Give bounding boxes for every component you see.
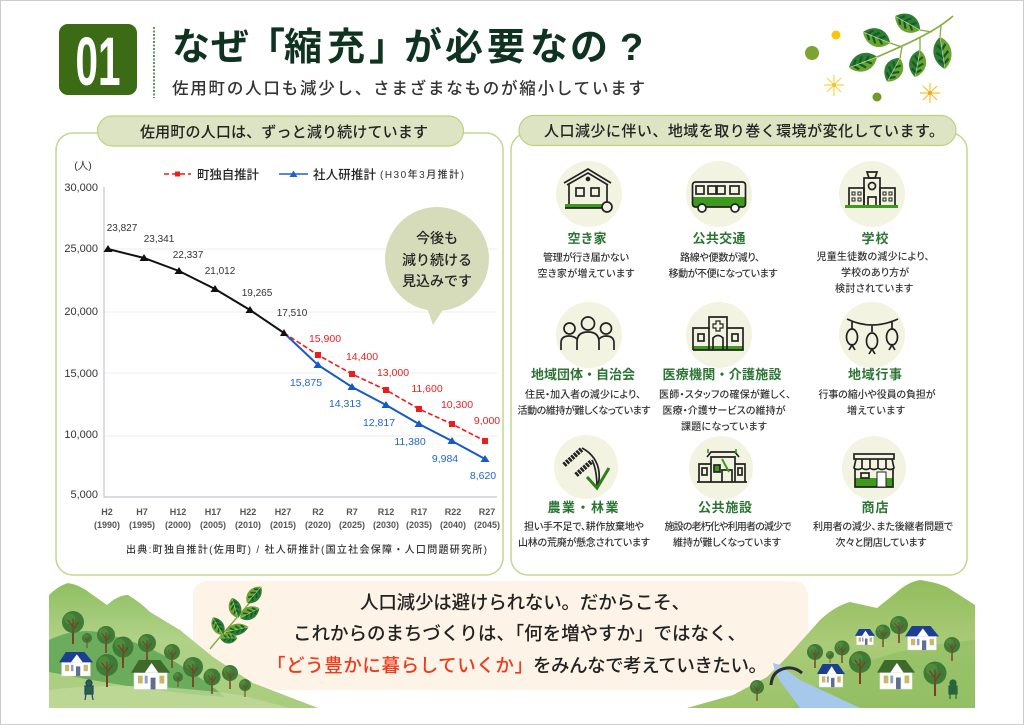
item: local events: 地域行事	[848, 367, 902, 382]
line chart: H22	[240, 507, 256, 517]
callout bubble: 今後も	[416, 230, 458, 246]
icon: rice	[564, 448, 609, 488]
line chart: 14,400	[346, 351, 378, 363]
line chart: (2040)	[440, 520, 466, 530]
item: vacant house: 空き家	[568, 231, 606, 246]
line chart: 10,000	[64, 429, 98, 441]
legend	[74, 160, 464, 182]
line chart: H12	[170, 507, 186, 517]
line chart: 21,012	[205, 266, 236, 277]
panel heading: population: 佐用町の人口は、ずっと減り続けています	[140, 123, 428, 141]
item: community groups: 活動の維持が難しくなっています	[518, 404, 651, 417]
river	[773, 663, 860, 708]
line chart: 9,000	[474, 415, 500, 427]
item: agriculture and forestry	[518, 435, 650, 549]
item: shops	[813, 436, 953, 549]
item: public transport: 路線や便数が減り、	[680, 251, 760, 264]
message panel: これからのまちづくりは、「何を増やすか」ではなく、	[293, 623, 746, 644]
item: local events: 増えています	[847, 404, 905, 417]
item: school	[816, 161, 930, 295]
line chart: H27	[275, 507, 291, 517]
line chart: R22	[445, 507, 461, 517]
line chart: 23,341	[144, 234, 175, 245]
line chart: (1995)	[129, 520, 155, 530]
item: agriculture and forestry: 山林の荒廃が懸念されています	[518, 536, 650, 549]
line chart: 11,380	[394, 436, 426, 448]
item: local events	[818, 302, 936, 417]
item: agriculture and forestry: 担い手不足で、耕作放棄地や	[524, 520, 644, 533]
line chart: (2030)	[373, 520, 399, 530]
item: community groups	[518, 302, 651, 417]
illustration: leaf sprig	[208, 583, 266, 649]
icon: lanterns	[846, 319, 898, 354]
line chart: 23,827	[107, 223, 138, 234]
line chart: 10,300	[441, 399, 473, 411]
line chart: (2000)	[165, 520, 191, 530]
legend: (人)	[74, 160, 92, 172]
item: local events: 行事の縮小や役員の負担が	[818, 388, 936, 401]
item: school: 学校	[862, 231, 888, 246]
message panel: 人口減少は避けられない。だからこそ、	[360, 592, 690, 613]
panel heading: environment: 人口減少に伴い、地域を取り巻く環境が変化しています。	[544, 122, 944, 140]
item: public facilities: 施設の老朽化や利用者の減少で	[664, 520, 792, 533]
line chart: (2005)	[200, 520, 226, 530]
number badge: 01	[76, 23, 120, 100]
header divider	[153, 27, 155, 98]
decoration: leaf branch	[805, 8, 954, 103]
illustration: right landscape	[687, 580, 975, 708]
line chart: (2025)	[339, 520, 365, 530]
item: shops: 商店	[862, 500, 888, 515]
line chart: H2	[101, 507, 113, 517]
illustration: left landscape	[49, 583, 318, 708]
item: public transport: 公共交通	[692, 231, 746, 246]
item: community groups: 地域団体・自治会	[531, 367, 635, 382]
item: vacant house: 空き家が増えています	[538, 267, 635, 280]
message panel: 「どう豊かに暮らしていくか」	[267, 655, 533, 676]
item: shops: 次々と閉店しています	[836, 536, 927, 549]
line chart: 5,000	[70, 489, 98, 501]
chart source: 出典:町独自推計(佐用町) / 社人研推計(国立社会保障・人口問題研究所)	[126, 543, 487, 556]
icon: people	[561, 317, 614, 350]
line chart: 8,620	[470, 470, 496, 482]
line chart: R7	[346, 507, 358, 517]
line chart: 17,510	[277, 308, 308, 319]
item: community groups: 住民・加入者の減少により、	[525, 388, 641, 401]
title: なぜ「縮充」が必要なの?	[172, 27, 643, 69]
item: shops: 利用者の減少、また後継者問題で	[813, 520, 953, 533]
line chart: 13,000	[377, 367, 409, 379]
panel heading: environment	[519, 116, 956, 146]
line chart: 15,000	[64, 368, 98, 380]
line chart: R12	[378, 507, 394, 517]
line chart: 20,000	[64, 306, 98, 318]
line chart: (2015)	[270, 520, 296, 530]
line chart	[64, 182, 500, 530]
callout bubble	[385, 207, 489, 325]
line chart: 15,900	[309, 333, 341, 345]
legend: (H30年3月推計)	[380, 168, 464, 181]
item: school: 学校のあり方が	[841, 266, 909, 279]
item: medical and care: 医療・介護サービスの維持が	[662, 404, 786, 417]
line chart: 15,875	[290, 377, 322, 389]
subtitle: 佐用町の人口も減少し、さまざまなものが縮小しています	[172, 78, 645, 98]
line chart: R2	[312, 507, 324, 517]
item: medical and care: 課題になっています	[681, 421, 767, 433]
line chart: H17	[205, 507, 221, 517]
item: agriculture and forestry: 農業・林業	[548, 500, 618, 515]
item: medical and care: 医療機関・介護施設	[662, 367, 782, 382]
panel: population chart	[56, 116, 503, 575]
item: public transport: 移動が不便になっています	[668, 267, 778, 280]
item: public facilities	[664, 436, 792, 549]
message panel	[193, 581, 808, 690]
line chart: 14,313	[329, 398, 361, 410]
item: school: 児童生徒数の減少により、	[816, 250, 930, 263]
line chart: 22,337	[173, 250, 204, 261]
item: vacant house	[538, 161, 635, 280]
callout bubble: 見込みです	[402, 273, 472, 289]
item: public transport	[668, 161, 778, 280]
item: school: 検討されています	[835, 282, 913, 295]
line chart: R27	[479, 507, 495, 517]
line chart: 30,000	[64, 182, 98, 194]
line chart: (2035)	[406, 520, 432, 530]
line chart: 25,000	[64, 243, 98, 255]
callout bubble: 減り続ける	[402, 252, 472, 268]
line chart: R17	[411, 507, 427, 517]
legend: 社人研推計	[313, 167, 376, 182]
icon: shop	[854, 454, 894, 487]
icon: house	[564, 169, 612, 212]
item: public facilities: 維持が難しくなっています	[673, 536, 781, 549]
item: medical and care: 医師・スタッフの確保が難しく、	[659, 388, 791, 401]
bridge	[771, 668, 802, 685]
legend: 町独自推計	[197, 167, 259, 182]
panel heading: population	[98, 116, 464, 146]
line chart: (1990)	[94, 520, 120, 530]
icon: public building	[697, 449, 747, 482]
item: public facilities: 公共施設	[698, 500, 752, 515]
line chart: (2010)	[235, 520, 261, 530]
message panel: をみんなで考えていきたい。	[533, 655, 767, 676]
panel: environment changes	[511, 116, 967, 575]
line chart: 9,984	[432, 453, 458, 465]
line chart: (2045)	[474, 520, 500, 530]
item: vacant house: 管理が行き届かない	[543, 251, 629, 264]
icon: bus	[692, 182, 746, 212]
item: medical and care	[659, 302, 791, 433]
icon: hospital	[693, 317, 743, 350]
line chart: 19,265	[242, 288, 273, 299]
line chart: H7	[136, 507, 148, 517]
number badge	[59, 23, 137, 100]
line chart: 11,600	[411, 383, 443, 395]
icon: school	[845, 172, 898, 208]
line chart: (2020)	[305, 520, 331, 530]
line chart: 12,817	[363, 417, 395, 429]
